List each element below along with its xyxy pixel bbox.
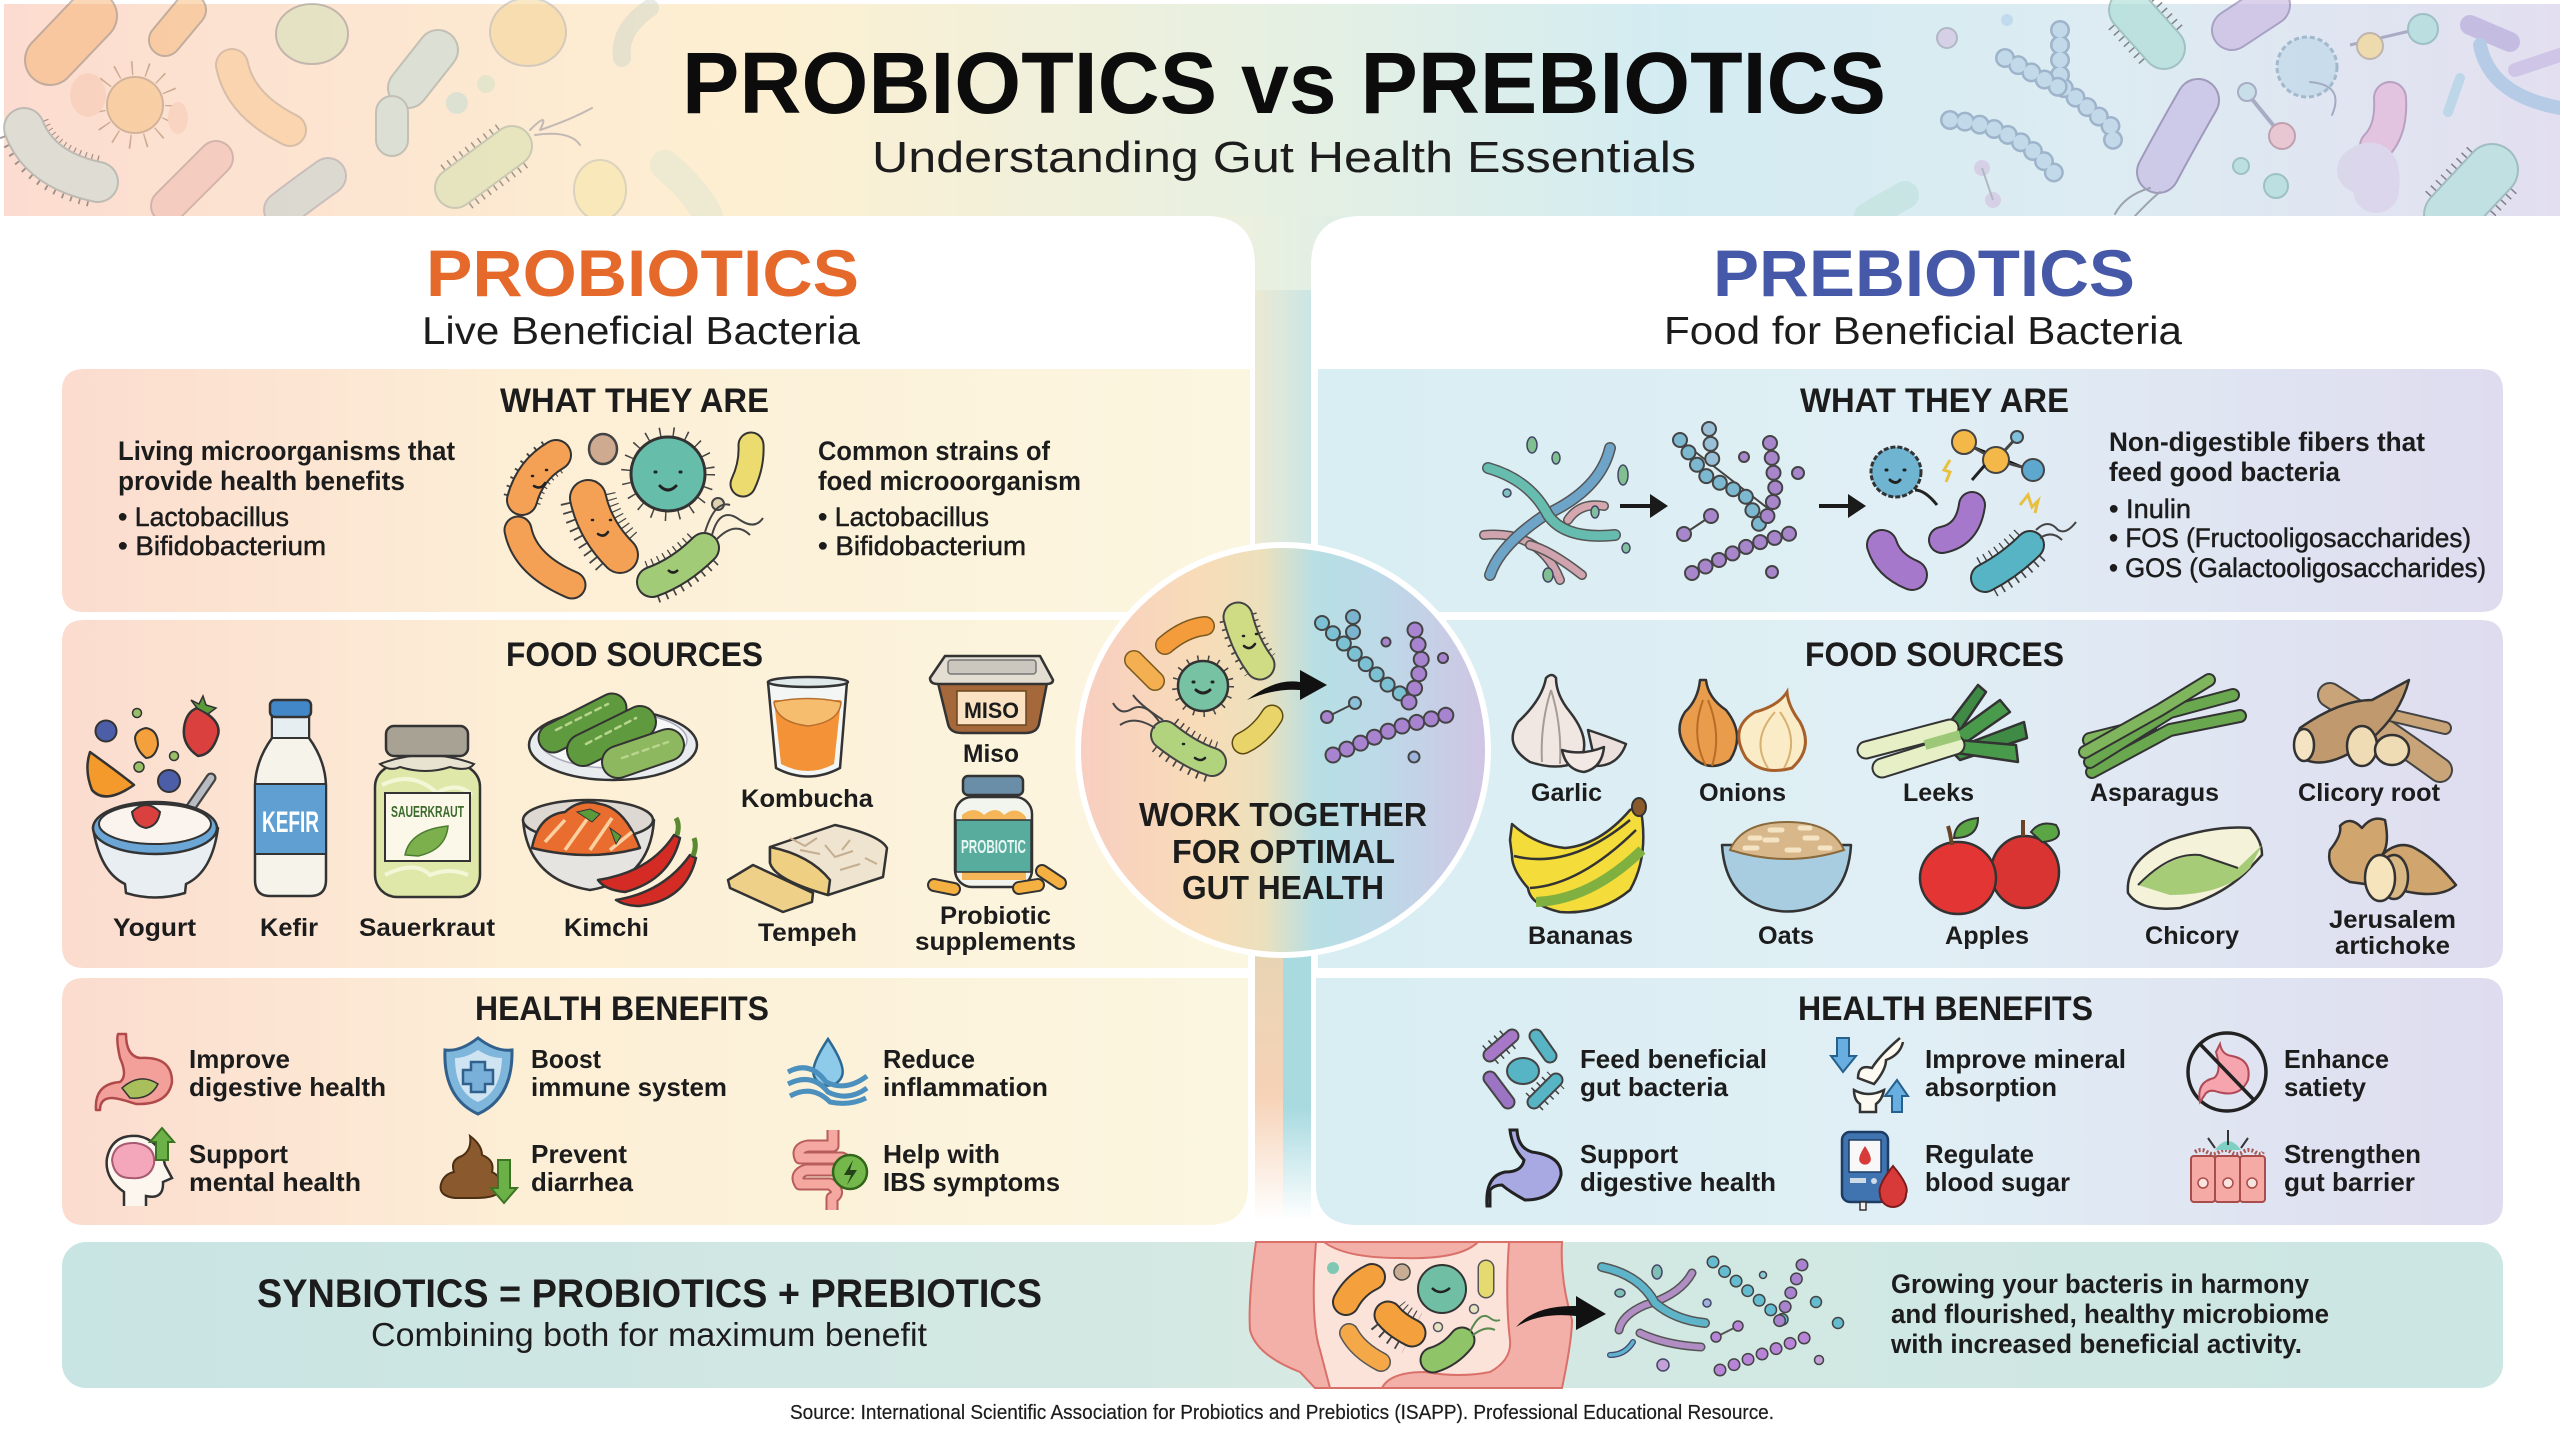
circle message: FOR OPTIMAL [1172,833,1395,870]
definition text: • FOS (Fructooligosaccharides) [2109,523,2471,553]
card: food sources [1318,620,2503,968]
card heading: WHAT THEY ARE [500,382,769,420]
card: food sources [62,620,1248,968]
benefit text [1925,1139,2070,1197]
card heading: HEALTH BENEFITS [1798,990,2093,1028]
food: miso tub [930,656,1053,733]
decorative microbes: left [24,0,708,220]
card: what they are [1318,369,2503,612]
synbiotics description: with increased beneficial activity. [1890,1329,2302,1359]
food: chicory root [2294,680,2445,770]
food: yogurt [87,696,219,898]
definition text: • Bifidobacterium [118,531,326,561]
source note: Source: International Scientific Association for Probiotics and Prebiotics (ISAPP). Professional Educational Resource. [790,1402,1774,1424]
food: garlic [1513,675,1626,772]
synbiotics heading: SYNBIOTICS = PROBIOTICS + PREBIOTICS [257,1272,1042,1316]
benefit text: mental health [189,1167,361,1197]
circle message: WORK TOGETHER [1139,796,1427,833]
label: Bananas [1528,922,1633,950]
label: Kimchi [564,914,649,942]
benefit text [1580,1044,1767,1102]
benefit text: gut bacteria [1580,1072,1729,1102]
icon: gut bacteria [1490,1036,1556,1102]
synbiotics subheading: Combining both for maximum benefit [371,1316,927,1353]
icon: bacteria fermenting fiber [1871,430,2076,578]
benefit text: absorption [1925,1072,2057,1102]
label: Kefir [260,914,318,942]
icon: glucose meter [1842,1132,1907,1210]
definition text: • Lactobacillus [118,502,289,532]
benefit text [1925,1044,2126,1102]
arrow [1620,494,1668,518]
benefit text: Improve [189,1044,290,1074]
label: Asparagus [2090,779,2219,807]
label: Onions [1699,779,1786,807]
synbiotics description: Growing your bacteris in harmony [1891,1269,2309,1299]
label: artichoke [2335,932,2450,960]
label: Oats [1758,922,1814,950]
arrow [1819,494,1866,518]
label: supplements [915,928,1076,956]
main title: PROBIOTICS vs PREBIOTICS [682,35,1886,132]
food: apples [1920,818,2059,914]
food: miso tub: MISO [964,698,1019,723]
benefit text: immune system [531,1072,727,1102]
benefit text: Reduce [883,1044,975,1074]
benefit text: Boost [531,1044,601,1074]
definition text: Living microorganisms that [118,436,455,466]
label: Chicory [2145,922,2239,950]
synbiotics description [1890,1269,2329,1359]
label [2329,906,2456,960]
benefit text: Feed beneficial [1580,1044,1767,1074]
benefit text: inflammation [883,1072,1048,1102]
benefit text: Strengthen [2284,1139,2421,1169]
label: Leeks [1903,779,1974,807]
card heading: FOOD SOURCES [506,636,763,674]
label: Probiotic [940,902,1051,930]
synbiotics banner [62,1242,2503,1388]
panel: probiotics [0,216,1255,1226]
circle message: GUT HEALTH [1182,869,1384,906]
card heading: HEALTH BENEFITS [475,990,769,1028]
benefit text [189,1139,361,1197]
food: tempeh [728,825,887,912]
definition text: Non-digestible fibers that [2109,427,2425,457]
food: leeks [1866,685,2027,768]
synbiotics description: and flourished, healthy microbiome [1891,1299,2329,1329]
definition text: provide health benefits [118,466,405,496]
circle message [1139,796,1427,906]
benefit text [1580,1139,1776,1197]
strains text [818,436,1081,561]
strains text: foed microoorganism [818,466,1081,496]
card: health benefits [62,978,1248,1225]
icon: gut barrier cells [2191,1130,2265,1202]
food: sauerkraut jar: SAUERKRAUT [391,804,464,821]
benefit text: Improve mineral [1925,1044,2126,1074]
icon: intestine with bolt [798,1130,867,1210]
label: Jerusalem [2329,906,2456,934]
icon: no stomach [2188,1033,2266,1111]
label [915,902,1076,956]
icon: stool with down arrow [441,1136,517,1203]
benefit text: Prevent [531,1139,627,1169]
benefit text: IBS symptoms [883,1167,1060,1197]
benefit text [531,1139,634,1197]
label: Clicory root [2298,779,2441,807]
icon: shield [445,1038,512,1114]
icon: head and brain [107,1128,174,1206]
benefit text [2284,1044,2389,1102]
icon: bacteria group [1113,617,1327,762]
icon: fiber strands [1484,437,1630,582]
food: sauerkraut jar [375,726,480,897]
subtitle: Understanding Gut Health Essentials [872,133,1696,182]
label: Tempeh [758,919,857,947]
food: probiotic supplements [934,776,1060,889]
food: kefir bottle: KEFIR [262,806,319,839]
central circle: work together [1075,542,1491,958]
arrow [1516,1296,1606,1330]
central gradient spine [1195,216,1370,1220]
icon: water drop and waves [788,1039,867,1103]
icon: intestine with microbes [1250,1242,1572,1388]
icon: fibers and chains [1602,1262,1844,1371]
header banner [4,0,2560,220]
benefit text: Support [1580,1139,1678,1169]
food: onions [1680,680,1805,770]
definition text: • GOS (Galactooligosaccharides) [2109,553,2486,583]
definition text [2109,427,2486,583]
benefit text: digestive health [1580,1167,1776,1197]
food: oats [1722,822,1851,912]
food: pickled cucumbers [529,704,697,780]
label: Garlic [1531,779,1602,807]
card: health benefits [1316,978,2503,1225]
benefit text: Regulate [1925,1139,2034,1169]
benefit text: Help with [883,1139,1000,1169]
benefit text: diarrhea [531,1167,634,1197]
decorative microbes: right [1868,5,2560,216]
benefit text [2284,1139,2421,1197]
icon: prebiotic chains [1677,429,1804,578]
card heading: WHAT THEY ARE [1800,382,2069,420]
benefit text: Enhance [2284,1044,2389,1074]
food: probiotic supplements: PROBIOTIC [961,837,1026,857]
icon: stomach [96,1034,172,1110]
benefit text [531,1044,727,1102]
benefit text [883,1139,1060,1197]
icon: bacteria cluster [518,432,763,585]
food: bananas [1510,798,1646,912]
panel: prebiotics [1311,216,2560,1226]
benefit text: digestive health [189,1072,386,1102]
icon: purple stomach [1487,1130,1561,1206]
strains text: • Lactobacillus [818,502,989,532]
benefit text [189,1044,386,1102]
label: Miso [963,740,1019,768]
benefit text [883,1044,1048,1102]
icon: prebiotic chains [1321,617,1448,762]
strains text: • Bifidobacterium [818,531,1026,561]
strains text: Common strains of [818,436,1051,466]
benefit text: gut barrier [2284,1167,2415,1197]
prebiotics heading: PREBIOTICS [1713,236,2135,310]
label: Sauerkraut [359,914,496,942]
food: kimchi [523,800,696,906]
food: chicory [2128,828,2262,909]
card: what they are [62,369,1250,612]
benefit text: Support [189,1139,288,1169]
benefit text: satiety [2284,1072,2367,1102]
label: Yogurt [113,914,197,942]
definition text: feed good bacteria [2109,457,2341,487]
food: asparagus [2085,680,2240,772]
label: Kombucha [741,785,874,813]
card heading: FOOD SOURCES [1805,636,2064,674]
definition text [118,436,455,561]
food: jerusalem artichoke [2329,819,2456,901]
food: kefir bottle [255,700,326,896]
prebiotics tagline: Food for Beneficial Bacteria [1664,310,2182,353]
benefit text: blood sugar [1925,1167,2070,1197]
food: kombucha [768,677,848,776]
probiotics heading: PROBIOTICS [426,236,859,310]
icon: bone and minerals [1831,1038,1908,1112]
label: Apples [1945,922,2029,950]
probiotics tagline: Live Beneficial Bacteria [422,310,860,353]
definition text: • Inulin [2109,494,2191,524]
